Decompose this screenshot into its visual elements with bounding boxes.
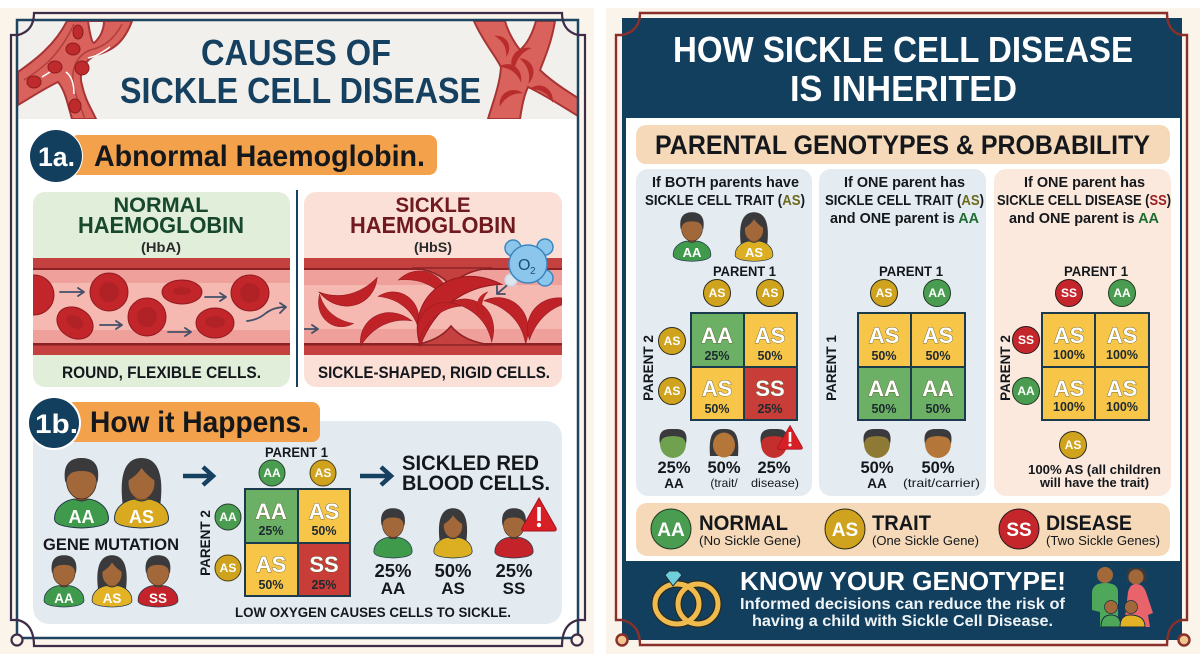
icon: oxygen molecule xyxy=(505,239,553,286)
outcome: 50% AS xyxy=(434,508,472,598)
punnett square one: AS xyxy=(664,384,680,398)
punnett square one: AS xyxy=(664,334,680,348)
punnett square one: AS xyxy=(709,286,725,300)
title: causes of sickle cell disease xyxy=(120,32,481,111)
outcome: 25% disease with warning xyxy=(751,425,802,490)
punnett square two: 50% xyxy=(871,402,897,416)
title: how sickle cell disease is inherited: HOW SICKLE CELL DISEASE xyxy=(673,29,1133,70)
punnett square one: AS xyxy=(762,286,778,300)
punnett square one: PARENT 1 xyxy=(713,264,776,279)
punnett square two: AS xyxy=(923,323,953,348)
legend item: disease: DISEASE xyxy=(1046,512,1132,535)
callout: know your genotype: having a child with Sickle Cell Disease. xyxy=(752,613,1053,630)
punnett square one: 25% xyxy=(704,349,730,363)
outcome: 25% SS with warning xyxy=(495,498,556,598)
heading 1a: abnormal haemoglobin: 1a. xyxy=(38,142,75,172)
legend item: normal: (No Sickle Gene) xyxy=(699,533,801,548)
punnett square one: AS xyxy=(755,323,785,348)
legend: genotype key xyxy=(636,503,1170,556)
outcome: all children AS: 100% AS (all children xyxy=(1028,462,1161,477)
punnett square: AS xyxy=(256,552,286,577)
outcome: 25% AA: 25% xyxy=(374,560,412,581)
decorative frame: inheritance xyxy=(616,13,1190,646)
icon: family xyxy=(1092,567,1153,627)
outcome: 25% AA: AA xyxy=(664,476,684,491)
column: both parents have trait xyxy=(636,169,812,496)
outcome: 25% AA xyxy=(657,429,691,491)
punnett square one xyxy=(641,264,797,420)
avatar: parent AA xyxy=(54,458,108,528)
heading 1b: how it happens: How it Happens. xyxy=(90,406,309,439)
outcome: 50% AA xyxy=(860,429,894,491)
panel: inheritance background xyxy=(606,8,1200,654)
punnett square: PARENT 2 xyxy=(198,510,213,576)
legend item: disease: SS xyxy=(1006,520,1032,541)
punnett square: AA xyxy=(255,499,287,524)
text: scenario one: If BOTH parents have xyxy=(652,174,799,191)
heading: normal haemoglobin: HAEMOGLOBIN xyxy=(78,212,244,238)
punnett square: SS xyxy=(309,552,339,577)
avatars: children: SS xyxy=(149,591,167,606)
outcome: 50% trait carrier: 50% xyxy=(921,459,955,477)
punnett square: 50% xyxy=(311,524,337,538)
caption: sickle shaped rigid cells: SICKLE-SHAPED, RIGID CELLS. xyxy=(318,363,550,382)
punnett square xyxy=(198,445,350,596)
avatar: parent AS xyxy=(114,458,168,528)
panel: normal haemoglobin xyxy=(14,192,290,387)
outcome: 50% trait xyxy=(707,429,741,490)
panel: how it happens xyxy=(27,396,562,624)
outcome: 25% AA: 25% xyxy=(657,459,691,477)
callout: know your genotype xyxy=(740,566,1066,630)
punnett square three: PARENT 1 xyxy=(1064,264,1128,279)
punnett square three xyxy=(998,264,1149,420)
title: causes of sickle cell disease: SICKLE CELL DISEASE xyxy=(120,70,481,111)
punnett square three: 100% xyxy=(1106,348,1138,362)
legend item: normal: NORMAL xyxy=(699,512,788,535)
punnett square three: 100% xyxy=(1053,348,1085,362)
outcome: all children AS: AS xyxy=(1065,438,1081,452)
outcome: 50% AS: 50% xyxy=(434,560,472,581)
illustration: normal blood vessel with round cells xyxy=(14,258,290,355)
punnett square two: AS xyxy=(869,323,899,348)
punnett square three: PARENT 2 xyxy=(998,335,1013,401)
punnett square three: SS xyxy=(1018,333,1034,347)
punnett square: 25% xyxy=(311,578,337,592)
heading 1b: how it happens: 1b. xyxy=(35,409,78,439)
punnett square: 25% xyxy=(258,524,284,538)
heading 1a: abnormal haemoglobin xyxy=(29,129,437,183)
heading: sickled red blood cells: SICKLED RED xyxy=(402,452,539,475)
label: gene mutation: GENE MUTATION xyxy=(43,535,179,554)
legend item: normal xyxy=(651,509,801,549)
arrow to sickled cells xyxy=(360,467,391,485)
icon: oxygen molecule: 2 xyxy=(530,266,536,277)
legend item: disease xyxy=(999,509,1160,549)
outcome: all children AS: will have the trait) xyxy=(1039,475,1149,490)
heading: sickled red blood cells: BLOOD CELLS. xyxy=(402,472,550,495)
punnett square two: AS xyxy=(876,286,892,300)
arrow to punnett square xyxy=(183,467,213,485)
outcome: 50% AA: 50% xyxy=(860,459,894,477)
punnett square two: 50% xyxy=(925,402,951,416)
text: scenario two: SICKLE CELL TRAIT (AS) xyxy=(825,192,984,209)
punnett square three: AS xyxy=(1107,323,1137,348)
punnett square one: AS xyxy=(702,376,732,401)
header illustration: healthy blood vessel xyxy=(18,21,132,119)
punnett square two: AA xyxy=(922,376,954,401)
title: causes of sickle cell disease: CAUSES OF xyxy=(201,32,391,73)
punnett square one: 50% xyxy=(757,349,783,363)
legend item: trait xyxy=(825,509,979,549)
heading 1b: how it happens xyxy=(27,396,320,450)
punnett square: PARENT 1 xyxy=(265,445,328,460)
heading: normal haemoglobin: (HbA) xyxy=(141,240,181,255)
punnett square: AA xyxy=(219,510,237,524)
punnett square three: AS xyxy=(1054,376,1084,401)
text: scenario three: SICKLE CELL DISEASE (SS) xyxy=(997,192,1171,209)
legend item: disease: (Two Sickle Genes) xyxy=(1046,533,1160,548)
punnett square: AS xyxy=(315,466,331,480)
punnett square: 50% xyxy=(258,578,284,592)
punnett square two: PARENT 1 xyxy=(879,264,943,279)
punnett square two: AA xyxy=(928,286,946,300)
text: scenario three: and ONE parent is AA xyxy=(1009,210,1159,227)
heading: sickle haemoglobin: HAEMOGLOBIN xyxy=(350,212,516,238)
heading: sickle haemoglobin: SICKLE xyxy=(396,194,470,217)
column: one parent trait, one AA xyxy=(819,169,986,496)
punnett square one: AA xyxy=(701,323,733,348)
punnett square two: PARENT 1 xyxy=(824,335,839,401)
icon: wedding rings xyxy=(655,571,718,624)
legend item: trait: (One Sickle Gene) xyxy=(872,533,979,548)
punnett square one: 25% xyxy=(757,402,783,416)
caption: low oxygen: LOW OXYGEN CAUSES CELLS TO SICKLE. xyxy=(235,604,511,620)
punnett square two: AA xyxy=(868,376,900,401)
avatars: children: AS xyxy=(103,591,121,606)
outcome: 50% AA: AA xyxy=(867,476,887,491)
legend item: normal: AA xyxy=(657,520,685,541)
punnett square one: PARENT 2 xyxy=(641,335,656,401)
punnett square three: 100% xyxy=(1106,400,1138,414)
callout: know your genotype: Informed decisions can reduce the risk of xyxy=(740,596,1066,613)
outcome: 25% SS with warning: 25% xyxy=(495,560,533,581)
heading 1a: abnormal haemoglobin: Abnormal Haemoglobin. xyxy=(94,140,425,173)
title: how sickle cell disease is inherited: IS INHERITED xyxy=(790,68,1017,109)
avatar: parent AS: AS xyxy=(129,507,154,527)
decorative frame: causes xyxy=(11,13,585,646)
panel: causes background xyxy=(0,8,594,654)
outcome: 25% disease with warning: disease) xyxy=(751,476,799,490)
heading: sickled red blood cells xyxy=(402,452,550,495)
header illustration: blocked blood vessel xyxy=(474,21,578,119)
outcome: 25% AA xyxy=(374,508,412,598)
outcome: 25% AA: AA xyxy=(381,579,405,598)
avatars: parents: AS xyxy=(745,245,763,260)
legend item: trait: AS xyxy=(832,520,858,541)
punnett square one: 50% xyxy=(704,402,730,416)
banner: parental genotypes and probability: PARENTAL GENOTYPES & PROBABILITY xyxy=(655,130,1150,160)
outcome: 25% SS with warning: SS xyxy=(503,579,525,598)
avatars: parents: AA xyxy=(683,245,702,260)
icon: oxygen molecule: O xyxy=(518,257,530,274)
heading: sickle haemoglobin xyxy=(350,194,516,255)
column: one parent disease, one AA xyxy=(994,169,1171,496)
text: scenario two xyxy=(825,174,984,227)
outcome: all children AS xyxy=(1028,432,1161,490)
punnett square: AS xyxy=(309,499,339,524)
avatars: children: AA xyxy=(54,591,74,606)
heading: normal haemoglobin: NORMAL xyxy=(114,194,209,217)
legend item: trait: TRAIT xyxy=(872,512,931,535)
panel: sickle haemoglobin xyxy=(304,192,576,387)
text: scenario two: and ONE parent is AA xyxy=(830,210,979,227)
punnett square one: SS xyxy=(755,376,785,401)
punnett square: AS xyxy=(220,561,236,575)
caption: round flexible cells: ROUND, FLEXIBLE CELLS. xyxy=(62,363,261,382)
punnett square three: AA xyxy=(1113,286,1131,300)
text: scenario one: SICKLE CELL TRAIT (AS) xyxy=(645,192,805,209)
callout: know your genotype: KNOW YOUR GENOTYPE! xyxy=(740,566,1066,596)
outcome: 50% trait carrier xyxy=(903,429,980,490)
punnett square two: 50% xyxy=(871,349,897,363)
avatar: parent AA: AA xyxy=(68,507,94,527)
punnett square three: AS xyxy=(1054,323,1084,348)
avatars: children xyxy=(44,555,178,607)
text: scenario one xyxy=(645,174,805,209)
text: scenario two: If ONE parent has xyxy=(844,174,965,191)
punnett square two xyxy=(824,264,965,420)
punnett square three: SS xyxy=(1061,286,1077,300)
illustration: narrowed vessel with sickled cells xyxy=(304,255,576,355)
heading: normal haemoglobin xyxy=(78,194,244,255)
punnett square: AA xyxy=(263,466,281,480)
punnett square three: AS xyxy=(1107,376,1137,401)
avatars: parents xyxy=(673,212,773,261)
title: how sickle cell disease is inherited xyxy=(673,29,1133,109)
outcome: 25% disease with warning: 25% xyxy=(757,459,791,477)
punnett square two: 50% xyxy=(925,349,951,363)
outcome: 50% trait: (trait/ xyxy=(710,476,738,490)
punnett square three: AA xyxy=(1017,384,1035,398)
text: scenario three: If ONE parent has xyxy=(1024,174,1145,191)
text: scenario three xyxy=(997,174,1171,227)
heading: sickle haemoglobin: (HbS) xyxy=(414,240,452,255)
outcome: 50% AS: AS xyxy=(441,579,465,598)
outcome: 50% trait carrier: (trait/carrier) xyxy=(903,476,980,490)
punnett square three: 100% xyxy=(1053,400,1085,414)
outcome: 50% trait: 50% xyxy=(707,459,741,477)
